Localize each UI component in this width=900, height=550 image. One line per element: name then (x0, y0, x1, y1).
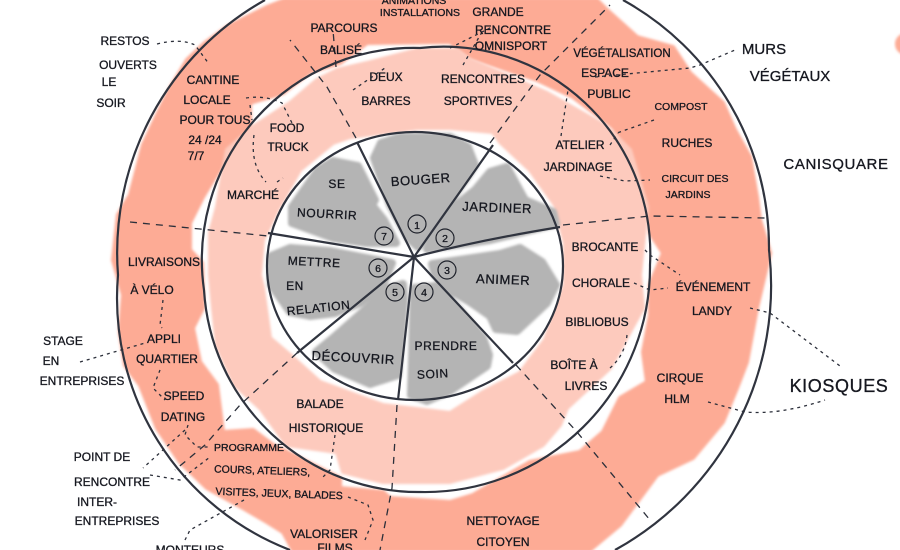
label: murs végétaux: MURS (742, 41, 786, 58)
label: découvrir: DÉCOUVRIR (311, 348, 395, 367)
light band labels: TRUCK (267, 140, 309, 154)
salmon band labels: COURS, ATELIERS, (214, 463, 310, 479)
label: point de rencontre: ENTREPRISES (75, 514, 159, 528)
label: restos: OUVERTS (99, 58, 157, 72)
light band labels (227, 70, 638, 435)
salmon band labels: BALISÉ (320, 42, 362, 57)
light band labels: SPORTIVES (444, 94, 512, 108)
salmon band labels (128, 0, 751, 550)
blob: animer (432, 248, 556, 331)
numbered circles: 5 (392, 287, 398, 299)
label: point de rencontre (74, 450, 159, 528)
salmon band labels: GRANDE (472, 5, 524, 19)
light band labels: CHORALE (572, 276, 630, 290)
salmon band labels: PUBLIC (587, 87, 631, 101)
salmon band labels: LOCALE (183, 93, 231, 107)
numbered circles: 4 (421, 287, 427, 299)
white centre disc (267, 132, 563, 400)
salmon band labels: VÉGÉTALISATION (573, 47, 671, 60)
label: canisquare: CANISQUARE (783, 156, 889, 173)
label: point de rencontre: POINT DE (74, 450, 130, 464)
salmon outer activity band (113, 0, 770, 550)
label: mettre en relation: RELATION (286, 298, 351, 318)
label: stage: EN (43, 354, 59, 368)
central ring outline and spokes (267, 132, 563, 400)
numbered circles: 2 (442, 233, 448, 245)
label: prendre soin (415, 339, 477, 382)
light band labels: BARRES (361, 94, 411, 108)
label: murs végétaux (742, 41, 830, 85)
second ring outline (202, 47, 650, 492)
label: mettre en relation: METTRE (287, 254, 341, 270)
outer ring outline (117, 0, 290, 550)
light band labels: DEUX (369, 70, 403, 84)
salmon band labels: DATING (161, 410, 205, 424)
blob: mettre en relation (271, 248, 392, 316)
salmon band labels: À VÉLO (130, 282, 174, 297)
label: prendre soin: PRENDRE (415, 339, 477, 353)
salmon band labels: INSTALLATIONS (380, 7, 460, 19)
light band labels: MARCHÉ (227, 187, 279, 202)
numbered circles: 1 (414, 220, 420, 232)
label: restos (96, 34, 157, 110)
salmon band labels: RENCONTRE (475, 23, 551, 37)
salmon band labels: CIRQUE (657, 371, 703, 385)
panel: central wheel of grey blobs (271, 137, 556, 401)
label: prendre soin: SOIN (417, 366, 449, 382)
salmon band labels: LANDY (692, 304, 732, 318)
light band labels: BALADE (296, 397, 344, 411)
label: restos: SOIR (96, 96, 126, 110)
numbered circles (369, 215, 456, 301)
salmon band labels: ÉVÉNEMENT (676, 279, 751, 294)
salmon band labels: VISITES, JEUX, BALADES (215, 486, 343, 502)
heading labels in wheel (286, 170, 532, 382)
outer ring outline right (615, 0, 771, 550)
label: kiosques: KIOSQUES (790, 376, 888, 396)
light band labels: ATELIER (555, 138, 605, 152)
salmon band labels: CIRCUIT DES (662, 173, 728, 185)
dotted connector lines (80, 41, 840, 540)
salmon band labels: LIVRAISONS (128, 255, 200, 269)
label: stage: ENTREPRISES (40, 374, 124, 388)
salmon band labels: PROGRAMME (214, 442, 284, 454)
label: stage (40, 334, 124, 388)
light pink inner activity band (210, 50, 647, 482)
blob: bouger (374, 137, 475, 247)
salmon band labels: NETTOYAGE (467, 514, 539, 528)
salmon band labels: RUCHES (662, 136, 712, 150)
salmon band labels: QUARTIER (136, 352, 198, 366)
light band labels: BIBLIOBUS (565, 315, 629, 329)
sector boundary dashes (130, 5, 765, 550)
decorative cut-off blob at right edge (895, 33, 900, 55)
numbered circles: 7 (381, 231, 387, 243)
light band labels: BOÎTE À (550, 357, 598, 372)
salmon band labels: PARCOURS (310, 21, 378, 35)
label: animer: ANIMER (476, 271, 530, 288)
light band labels: RENCONTRES (441, 72, 525, 86)
salmon band labels: SPEED (164, 389, 205, 403)
numbered circles: 6 (375, 263, 381, 275)
salmon band labels: HLM (664, 392, 690, 406)
label: jardiner: JARDINER (462, 199, 532, 216)
label: se nourrir: SE (328, 177, 346, 191)
light band labels: LIVRES (565, 379, 607, 393)
blob: se nourrir (292, 161, 396, 243)
label: mettre en relation (286, 254, 351, 318)
label: stage: STAGE (43, 334, 83, 348)
label: point de rencontre: RENCONTRE (74, 475, 150, 489)
label: mettre en relation: EN (286, 279, 304, 293)
blob: découvrir (316, 284, 404, 384)
salmon band labels: COMPOST (654, 101, 708, 113)
light band labels: HISTORIQUE (289, 421, 363, 435)
numbered circles: 3 (444, 265, 450, 277)
salmon band labels: CITOYEN (476, 535, 530, 549)
salmon band labels: POUR TOUS (180, 113, 250, 127)
label: restos: RESTOS (100, 34, 150, 48)
label: se nourrir: NOURRIR (297, 205, 358, 223)
salmon band labels: APPLI (147, 332, 181, 346)
salmon band labels: JARDINS (666, 189, 710, 201)
salmon band labels: 24 /24 (188, 133, 222, 147)
label: murs végétaux: VÉGÉTAUX (750, 68, 830, 85)
salmon band labels: ESPACE (581, 66, 629, 80)
light band labels: JARDINAGE (544, 160, 612, 174)
light band labels: FOOD (270, 121, 305, 135)
blob: prendre soin (411, 286, 489, 401)
label: point de rencontre: INTER- (77, 495, 117, 509)
light band labels: BROCANTE (572, 240, 638, 254)
label: se nourrir (297, 177, 358, 223)
salmon band labels: VALORISER (290, 527, 358, 541)
label: restos: LE (102, 75, 116, 89)
salmon band labels: OMNISPORT (475, 39, 548, 53)
salmon band labels: CANTINE (187, 73, 239, 87)
blob: jardiner (427, 167, 556, 249)
salmon band labels: 7/7 (188, 149, 205, 163)
label: bouger: BOUGER (390, 170, 451, 189)
